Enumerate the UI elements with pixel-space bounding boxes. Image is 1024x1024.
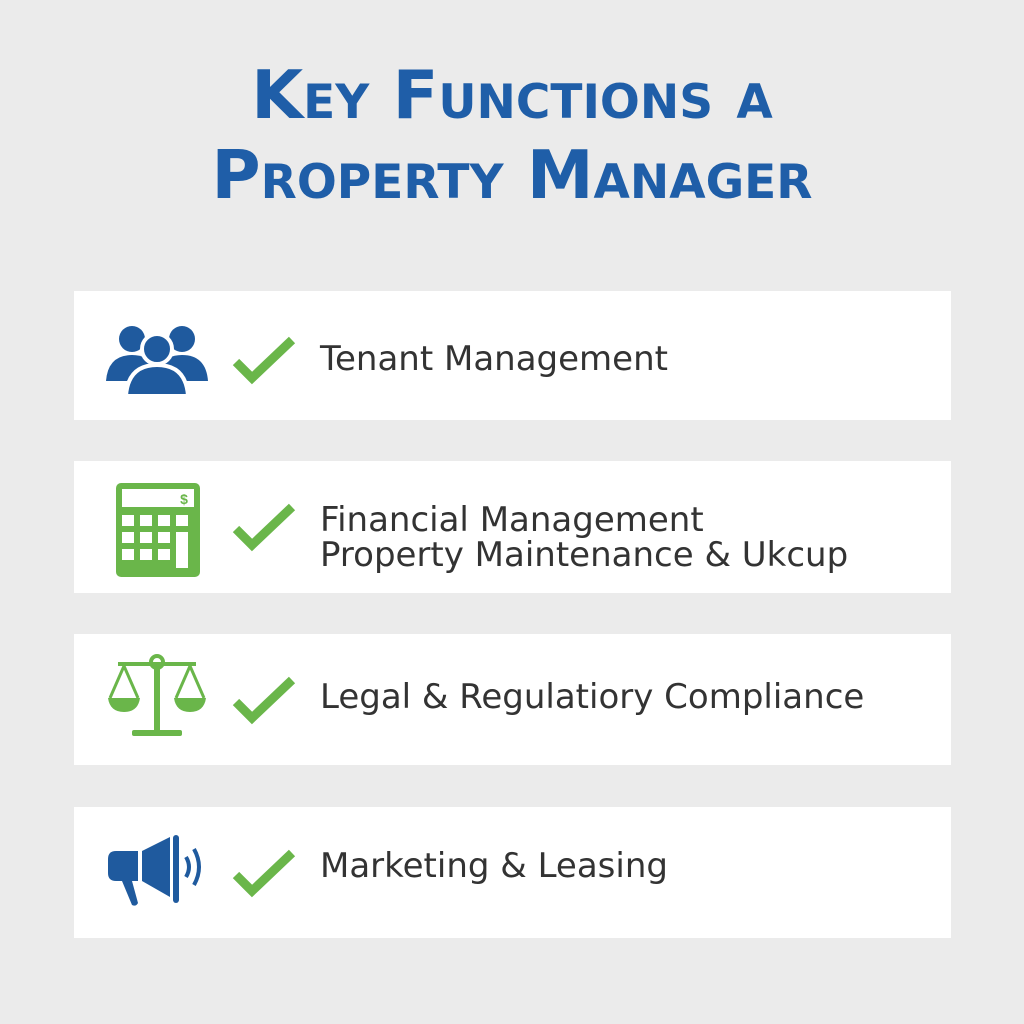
title (212, 56, 812, 214)
icon: people (106, 326, 208, 394)
title: Property Manager (212, 136, 812, 214)
title: Key Functions a (251, 56, 773, 134)
icon: scales (108, 654, 206, 736)
check (232, 676, 295, 724)
text: Marketing & Leasing (320, 846, 668, 886)
check (232, 850, 295, 898)
text: Property Maintenance & Ukcup (320, 535, 848, 575)
panel: marketing (74, 807, 951, 938)
check (232, 504, 295, 552)
text: Tenant Management (320, 339, 668, 379)
panel: tenant management (74, 291, 951, 420)
icon: megaphone (108, 835, 201, 906)
icon: calculator: $ (180, 491, 188, 507)
check (232, 336, 295, 384)
panel: financial (74, 461, 951, 593)
text (320, 500, 848, 575)
text: Financial Management (320, 500, 704, 540)
icon: calculator (116, 483, 200, 577)
panel: legal (74, 634, 951, 765)
text: Legal & Regulatiory Compliance (320, 677, 864, 717)
